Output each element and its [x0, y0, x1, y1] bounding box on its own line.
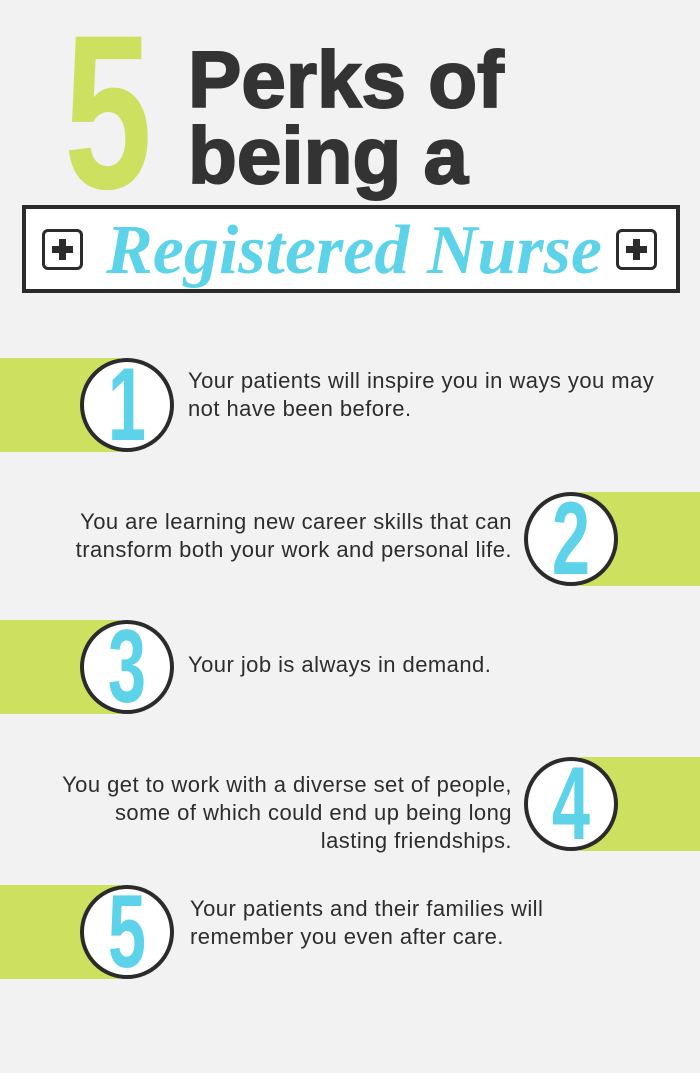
perk 3: Your job is always in demand. [188, 652, 491, 677]
perk 4: lasting friendships. [321, 828, 512, 853]
perk 1: not have been before. [188, 396, 412, 421]
title box: Registered Nurse [22, 205, 680, 293]
title: Perks of [188, 35, 504, 124]
perk 5 [0, 885, 543, 979]
title: being a [188, 111, 468, 200]
perk 2: transform both your work and personal life. [76, 537, 512, 562]
perk 1: Your patients will inspire you in ways you may [188, 368, 654, 393]
icon: plus right [616, 229, 657, 270]
perk 1 [0, 358, 654, 452]
perk 2: You are learning new career skills that can [80, 509, 512, 534]
perk 5: Your patients and their families will [190, 896, 543, 921]
perk 5: remember you even after care. [190, 924, 504, 949]
perk 4: You get to work with a diverse set of people, [62, 772, 512, 797]
script heading: Registered Nurse [106, 212, 602, 289]
perk 2 [76, 492, 700, 586]
perk 3 [0, 620, 491, 714]
title [188, 35, 505, 201]
perk 4: some of which could end up being long [115, 800, 512, 825]
icon: plus left [42, 229, 83, 270]
perk 4 [62, 757, 700, 853]
